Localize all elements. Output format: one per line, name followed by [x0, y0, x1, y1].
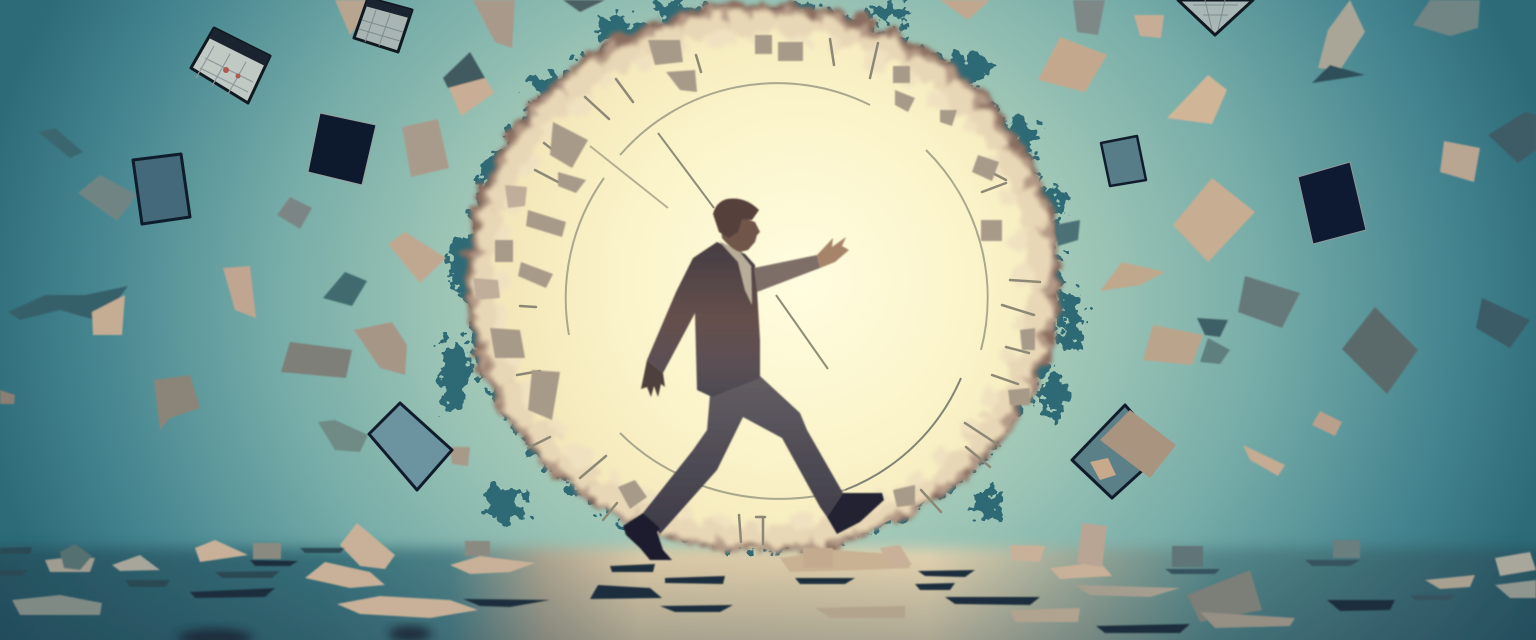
dark slivers on floor — [0, 547, 1455, 633]
front arm — [754, 255, 820, 292]
tablet: lower left — [369, 403, 452, 490]
tablet: slate left — [133, 154, 190, 224]
tablet: dark left — [308, 113, 376, 185]
calendars — [191, 0, 1253, 103]
jacket — [647, 242, 760, 397]
front leg and shoe — [712, 376, 884, 534]
walking man — [623, 198, 884, 560]
hour ticks — [517, 39, 1040, 544]
tablets — [133, 113, 1366, 498]
glowing clock face — [475, 12, 1049, 548]
light papers on floor — [12, 523, 1536, 628]
tablet: small right — [1101, 136, 1146, 186]
tablet: lower right with paper — [1072, 405, 1176, 498]
clock hands — [590, 133, 828, 369]
calendar: top right — [1178, 0, 1253, 35]
tablet: dark right — [1298, 162, 1366, 244]
calendar: left — [191, 28, 270, 103]
ring fragments — [450, 35, 1080, 509]
floor — [0, 548, 1536, 640]
flying papers right — [940, 0, 1536, 476]
flying papers left — [0, 0, 605, 452]
trailing hand — [641, 360, 665, 397]
shirt and tie — [719, 241, 752, 305]
head — [713, 198, 760, 252]
dark blurs at bottom edge — [177, 626, 432, 640]
boxes on floor — [60, 540, 1360, 570]
jagged dark halo — [441, 2, 1082, 548]
smoke ring — [470, 8, 1054, 548]
back leg and shoe — [623, 395, 745, 560]
inner clock circle — [566, 83, 988, 499]
clock portal — [441, 2, 1082, 548]
raised hand — [817, 237, 849, 268]
calendar: top left — [354, 0, 412, 52]
floor debris — [0, 523, 1536, 640]
